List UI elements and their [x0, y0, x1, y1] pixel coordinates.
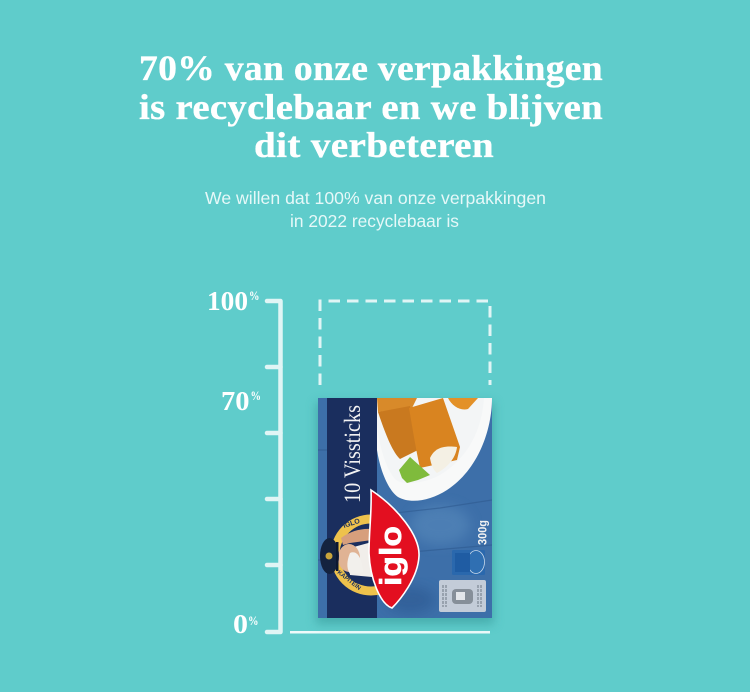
- title: 70% van onze verpakkingen: [139, 48, 603, 88]
- title: [139, 48, 603, 165]
- arm: [341, 529, 372, 545]
- weight: 300g: [476, 520, 490, 545]
- iglo logo: [369, 490, 419, 608]
- captain badge: KAPITEIN: [336, 570, 362, 592]
- axis scale: [267, 301, 280, 632]
- captain badge: [320, 514, 378, 596]
- axis label: 0%: 0: [233, 608, 248, 639]
- axis label: 0%: [233, 608, 258, 639]
- MSC label: [452, 550, 485, 575]
- lettuce: [399, 457, 430, 483]
- axis label: 100%: %: [249, 288, 260, 303]
- cap: [320, 538, 339, 574]
- iglo fish sticks package: [318, 398, 492, 618]
- axis label: 70%: [221, 385, 261, 416]
- fish sticks: [377, 398, 478, 473]
- package background: [318, 398, 492, 618]
- dashed outline for remaining 30%: [320, 301, 490, 385]
- plate: [377, 398, 492, 501]
- title: is recyclebaar en we blijven: [139, 87, 603, 127]
- dark blue band: [327, 398, 377, 618]
- axis label: 70%: 70: [221, 385, 250, 416]
- product name: 10 Vissticks: [340, 405, 365, 503]
- subtitle: [205, 188, 546, 231]
- iglo fish sticks package: iglo: [373, 526, 408, 586]
- axis label: 100%: 100: [207, 285, 248, 316]
- wood texture: [318, 450, 492, 614]
- axis label: 0%: %: [248, 613, 258, 628]
- face: [338, 544, 360, 572]
- nutrition label: [439, 580, 486, 612]
- package shadow: [316, 402, 494, 624]
- title: dit verbeteren: [254, 125, 494, 165]
- subtitle: We willen dat 100% van onze verpakkingen: [205, 188, 546, 208]
- baseline: [290, 631, 490, 634]
- axis label: 70%: %: [250, 388, 261, 403]
- captain badge: IGLO: [342, 518, 361, 530]
- subtitle: in 2022 recyclebaar is: [290, 211, 459, 231]
- coat and beard: [350, 542, 372, 577]
